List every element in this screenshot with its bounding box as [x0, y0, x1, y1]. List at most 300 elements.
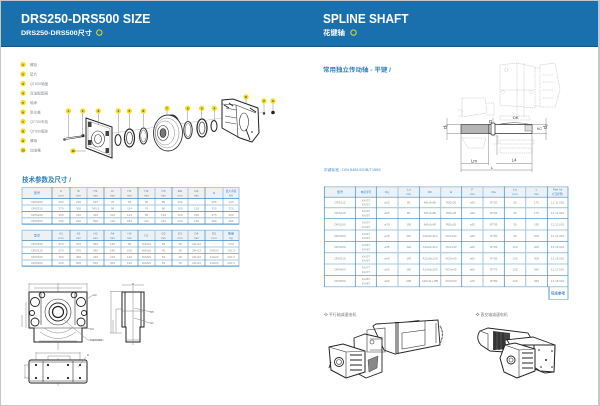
- table: dimensions 2: 140: [110, 248, 115, 252]
- table: spline shaft parameters: ø60: [470, 268, 475, 272]
- dimension lines: [443, 115, 549, 172]
- table: dimensions 1: 100: [177, 219, 183, 223]
- table: dimensions 2: 24H13: [192, 255, 201, 259]
- table: spline shaft parameters: ø36: [470, 211, 475, 215]
- table: dimensions 2: kg: [229, 236, 233, 240]
- table: spline shaft parameters: 12.18.001: [551, 279, 565, 283]
- technical drawing: front view: D2: [93, 293, 97, 297]
- parts legend: QT700车轮: [30, 119, 49, 124]
- table: dimensions 1: 70: [111, 200, 114, 204]
- table: spline shaft parameters: ø36: [470, 200, 475, 204]
- table: spline shaft parameters: ø40: [470, 245, 475, 249]
- table: spline shaft parameters: KA/47: [362, 232, 370, 236]
- table: spline shaft parameters: KA/37: [362, 203, 370, 207]
- callout lines and numbers: 3: [97, 109, 99, 113]
- technical drawing: front view: 4-Q4×H81: [90, 338, 103, 342]
- table: dimensions 2: D2: [162, 232, 166, 236]
- table: dimensions 2: 38: [178, 242, 182, 246]
- table: dimensions 1: 110: [110, 219, 115, 223]
- table: dimensions 1: 335: [211, 206, 217, 210]
- table: dimensions 2: 210: [110, 255, 115, 259]
- table: dimensions 2: 500: [58, 261, 64, 265]
- table: dimensions 1: H1: [94, 189, 98, 193]
- callout lines and numbers: 2: [82, 109, 84, 113]
- table: dimensions 1: 360: [58, 213, 64, 217]
- table: dimensions 1: 345.5: [92, 206, 100, 210]
- table: dimensions 1: 130: [161, 213, 166, 217]
- table: dimensions 1: 60: [145, 200, 148, 204]
- table: dimensions 1: 700: [58, 219, 64, 223]
- table: spline shaft parameters: ø25: [384, 200, 390, 204]
- table: dimensions 2: D4: [195, 232, 199, 236]
- table: dimensions 1: mm: [177, 194, 183, 198]
- table: dimensions 2: 40: [162, 248, 165, 252]
- table: spline shaft parameters: ø35: [384, 234, 390, 238]
- table: spline shaft parameters: ø30: [384, 222, 390, 226]
- table: dimensions 1: 220: [228, 206, 234, 210]
- table: spline shaft parameters: 175: [534, 200, 539, 204]
- table: dimensions 2: D5: [212, 232, 216, 236]
- table: spline shaft parameters: DRS400: [334, 268, 346, 272]
- table: spline shaft parameters: RT35: [490, 222, 498, 226]
- table: spline shaft parameters: mm: [534, 192, 539, 196]
- table: spline shaft parameters: KA/47: [362, 236, 370, 240]
- dimension lines: d₁: [443, 124, 449, 129]
- table: dimensions 2: 140: [110, 242, 115, 246]
- subtitle: spline shaft in Chinese: 花键轴: [323, 28, 345, 37]
- callout lines and numbers: 6: [187, 106, 189, 110]
- table: spline shaft parameters: DRS200: [334, 234, 346, 238]
- parts legend: [20, 62, 49, 153]
- table: spline shaft parameters: ø70: [470, 279, 475, 283]
- table: dimensions 1: ED: [178, 189, 183, 193]
- table: spline shaft parameters: RO0x40: [445, 256, 457, 260]
- table: spline shaft parameters: ø60: [384, 279, 390, 283]
- table: spline shaft parameters: 50: [513, 211, 517, 215]
- table: dimensions 2: mm: [58, 236, 64, 240]
- note: key standard: 平键标准 : DIN 5481/GOB/T1555: [324, 167, 381, 172]
- parts legend: 10: [21, 148, 25, 152]
- table: spline shaft parameters: Part Nr: [553, 188, 563, 192]
- title: DRS250-DRS500 SIZE: DRS250-DRS500 SIZE: [21, 12, 150, 26]
- callout lines and numbers: 9: [272, 99, 274, 103]
- table: spline shaft parameters: KA/37: [362, 225, 370, 229]
- table: spline shaft parameters: ø40: [384, 256, 390, 260]
- table: spline shaft parameters: M8x5x90: [424, 222, 436, 226]
- table: spline shaft parameters: 80: [407, 200, 411, 204]
- table: dimensions 2: 330.3: [227, 261, 235, 265]
- callout lines and numbers: [66, 94, 276, 154]
- table: dimensions 1: 440: [93, 213, 98, 217]
- header band: right page: [300, 1, 598, 47]
- table: spline shaft parameters: DRS160: [334, 222, 346, 226]
- table: dimensions 2: 500: [76, 261, 81, 265]
- callout lines and numbers: 8: [245, 95, 247, 99]
- table: spline shaft parameters: 65: [513, 234, 517, 238]
- table: dimensions 1: 130: [194, 213, 199, 217]
- table: dimensions 2: 310: [76, 242, 81, 246]
- table: spline shaft parameters: 120: [406, 245, 412, 249]
- parts legend: 9: [22, 139, 24, 143]
- dimension lines: DK: [513, 115, 519, 120]
- table: spline shaft parameters: 80: [407, 211, 411, 215]
- table: dimensions 1: N: [213, 191, 215, 195]
- table: spline shaft parameters: 130: [512, 256, 518, 260]
- technical drawing: front view: [22, 283, 104, 350]
- table: dimensions 2: 220.3: [227, 255, 235, 259]
- table: dimensions 1: 310: [76, 213, 81, 217]
- table: dimensions 2: 8xM20: [142, 255, 151, 259]
- table: dimensions 1: 最大承载: [226, 189, 237, 193]
- technical drawing: front view: D3: [90, 327, 94, 331]
- table: dimensions 1: 100: [177, 213, 183, 217]
- table: spline shaft parameters: 12.14.001: [551, 234, 565, 238]
- table: spline shaft parameters: 120: [512, 245, 518, 249]
- table: spline shaft parameters: KA/87: [362, 277, 370, 281]
- table: dimensions 1: 245: [93, 200, 98, 204]
- table: dimensions 2: 350: [93, 242, 98, 246]
- table: spline shaft parameters: 型号: [337, 189, 343, 194]
- parts legend: 加油嘴: [30, 148, 41, 152]
- table: dimensions 1: mm: [76, 194, 81, 198]
- table: dimensions 2: 重量: [228, 230, 234, 236]
- parts legend: QT500箱体: [30, 128, 49, 134]
- table: dimensions 1: 型号: [34, 190, 40, 195]
- table: dimensions 1: 110: [110, 213, 115, 217]
- table: spline shaft parameters: 12.16.001: [551, 256, 565, 260]
- title: SPLINE SHAFT: SPLINE SHAFT: [323, 12, 409, 26]
- table: dimensions 2: D1: [145, 234, 149, 238]
- motor: right angle shaft: [478, 328, 555, 378]
- table: dimensions 1: DRS250: [31, 200, 43, 204]
- table: spline shaft parameters: A10x8x110: [423, 234, 438, 238]
- table: spline shaft parameters: 200: [534, 234, 539, 238]
- table: dimensions 2: DRS400: [31, 255, 43, 259]
- table: dimensions 2: A1: [59, 232, 63, 236]
- table: dimensions 1: 80: [162, 200, 165, 204]
- table: dimensions 1: 90: [111, 206, 114, 210]
- parts legend: 6: [22, 110, 24, 114]
- table: dimensions 2: [22, 230, 239, 266]
- table: spline shaft parameters: RT89: [490, 279, 498, 283]
- table: dimensions 1: 110: [144, 219, 149, 223]
- table: spline shaft parameters: mm: [470, 192, 475, 196]
- parts legend: 轴承: [30, 100, 38, 105]
- table: dimensions 2: 120: [127, 255, 132, 259]
- table: spline shaft parameters: 电机型号: [361, 190, 372, 194]
- heading: common independent drive shaft: 常用独立传动轴 - 平键 /: [323, 66, 391, 74]
- parts legend: 7: [22, 120, 24, 124]
- table: spline shaft parameters: E: [450, 190, 452, 194]
- shaft: [461, 123, 532, 135]
- table: dimensions 1: 400: [228, 219, 234, 223]
- callout lines and numbers: 5: [128, 109, 130, 113]
- table: dimensions 2: 370: [76, 248, 81, 252]
- table: spline shaft parameters: M6x4x80: [424, 200, 436, 204]
- table: dimensions 1: 220: [76, 200, 81, 204]
- table: spline shaft parameters: DRS315: [334, 256, 346, 260]
- label: right angle gear motor: ❖ 直交轴减速电机: [476, 312, 508, 317]
- table: dimensions 1: H3: [162, 189, 166, 193]
- parts legend: 2: [22, 72, 24, 76]
- table: dimensions 1: mm: [110, 194, 115, 198]
- table: spline shaft parameters: ø35: [384, 245, 390, 249]
- table: spline shaft parameters: L: [536, 188, 538, 192]
- table: dimensions 1: 95: [145, 213, 148, 217]
- icon: yellow ring: [97, 30, 102, 35]
- table: dimensions 1: 70: [145, 206, 148, 210]
- table: spline shaft parameters: 140: [406, 256, 412, 260]
- label: parallel shaft gear motor: ❖ 平行轴减速电机: [324, 312, 356, 317]
- table: spline shaft parameters: KA/37: [362, 209, 370, 213]
- table: dimensions 2: 340: [93, 248, 98, 252]
- table: spline shaft parameters: DRS500: [334, 279, 346, 283]
- parts legend: 3: [22, 82, 24, 86]
- table: dimensions 2: 54: [162, 242, 165, 246]
- table: spline shaft parameters: 110: [406, 234, 411, 238]
- dimension lines: L4: [512, 158, 517, 162]
- table: spline shaft parameters: RT75: [490, 268, 498, 272]
- table: dimensions 1: R: [111, 189, 114, 193]
- table: spline shaft parameters: 195: [534, 222, 539, 226]
- table: spline shaft parameters: R00x25: [446, 222, 456, 226]
- table: spline shaft parameters: RO0x50: [445, 279, 457, 283]
- table: dimensions 2: DRS250: [31, 242, 43, 246]
- technical drawing: side view: D5: [150, 310, 154, 314]
- table: dimensions 1: DRS315: [31, 206, 43, 210]
- table: dimensions 1: mm: [93, 194, 98, 198]
- table: dimensions 2: 520: [93, 261, 98, 265]
- table: spline shaft parameters: A18x11x185: [422, 279, 439, 283]
- table: spline shaft parameters: [324, 186, 568, 300]
- table: spline shaft parameters: 包括参考: [551, 290, 566, 296]
- table: dimensions 2: 450: [76, 255, 81, 259]
- technical drawing: bottom view: [24, 352, 89, 386]
- table: spline shaft parameters: M6x4x80: [424, 211, 436, 215]
- table: dimensions 2: 78: [178, 261, 182, 265]
- table: spline shaft parameters: 50: [513, 222, 517, 226]
- table: dimensions 1: mm: [144, 194, 149, 198]
- table: dimensions 1: A: [60, 189, 63, 193]
- callout lines and numbers: 5: [201, 106, 203, 110]
- parts legend: 双油脂垫圈: [30, 90, 48, 96]
- table: spline shaft parameters: RC2x30: [446, 234, 457, 238]
- table: spline shaft parameters: R00x25: [446, 200, 456, 204]
- ghosted gear housing: [458, 63, 560, 153]
- table: spline shaft parameters: ø40: [470, 234, 475, 238]
- table: dimensions 2: 440: [93, 255, 98, 259]
- callout lines and numbers: 6: [142, 109, 144, 113]
- table: dimensions 2: 70.0: [228, 242, 234, 246]
- table: dimensions 1: 140: [228, 200, 234, 204]
- callout lines and numbers: 2: [263, 99, 265, 103]
- table: dimensions 2: A4: [111, 232, 115, 236]
- table: dimensions 2: 130.3: [227, 248, 235, 252]
- table: dimensions 1: 300: [76, 206, 81, 210]
- table: dimensions 2: mm: [93, 236, 98, 240]
- table: spline shaft parameters: 140: [512, 279, 518, 283]
- table: spline shaft parameters: 130: [512, 268, 518, 272]
- table: spline shaft parameters: RC2x30: [446, 245, 457, 249]
- table: spline shaft parameters: 50: [513, 200, 517, 204]
- table: spline shaft parameters: A10x8x110: [423, 245, 438, 249]
- table: spline shaft parameters: 359: [534, 279, 539, 283]
- table: spline shaft parameters: 206: [534, 245, 539, 249]
- technical drawing: side view: D1: [150, 321, 154, 325]
- table: spline shaft parameters: Ld: [407, 188, 411, 192]
- header band: left page: [1, 1, 300, 47]
- table: dimensions 1: DRS500: [31, 219, 43, 223]
- table: spline shaft parameters: 12.12.001: [551, 211, 565, 215]
- spline shaft technical drawing: [443, 63, 560, 172]
- technical drawing: side view: B: [132, 282, 134, 286]
- table: spline shaft parameters: DRS250: [334, 245, 346, 249]
- table: dimensions 1: 265: [211, 200, 217, 204]
- parts legend: 8: [22, 129, 24, 133]
- table: dimensions 1: D4: [195, 189, 199, 193]
- parts legend: 4: [22, 91, 24, 95]
- table: spline shaft parameters: ø25: [384, 211, 390, 215]
- table: dimensions 2: 型号: [34, 232, 40, 238]
- table: dimensions 1: 240: [76, 219, 81, 223]
- table: dimensions 2: mm: [161, 236, 166, 240]
- table: dimensions 2: 100: [127, 248, 132, 252]
- table: dimensions 2: DRS315: [31, 248, 43, 252]
- table: dimensions 1: 260: [58, 200, 64, 204]
- dimension lines: d₂: [543, 124, 549, 129]
- table: spline shaft parameters: 340: [534, 268, 539, 272]
- table: spline shaft parameters: DRS125: [334, 211, 346, 215]
- table: spline shaft parameters: 12.11.001: [551, 200, 564, 204]
- table: dimensions 2: mm: [211, 236, 217, 240]
- table: dimensions 2: mm: [127, 236, 132, 240]
- table: spline shaft parameters: RT50: [490, 234, 498, 238]
- table: spline shaft parameters: Dw: [491, 190, 497, 194]
- table: spline shaft parameters: RT65: [490, 245, 498, 249]
- table: dimensions 1: 475: [211, 213, 217, 217]
- table: spline shaft parameters: 175: [534, 211, 539, 215]
- table: spline shaft parameters: RT65: [490, 256, 498, 260]
- table: dimensions 1: B: [77, 189, 80, 193]
- callout lines and numbers: 10: [71, 149, 75, 153]
- table: spline shaft parameters: KA/77: [362, 270, 370, 274]
- technical drawing: bottom view: D: [87, 353, 89, 357]
- table: dimensions 1: 120: [194, 206, 199, 210]
- parts legend: QT600轴盖: [30, 81, 49, 86]
- table: spline shaft parameters: Lw: [513, 188, 518, 192]
- table: spline shaft parameters: DK: [428, 190, 433, 194]
- table: dimensions 2: mm: [194, 236, 199, 240]
- table: dimensions 2: 24H20: [210, 255, 219, 259]
- table: dimensions 1: 183: [127, 219, 132, 223]
- table: spline shaft parameters: 12.15.001: [551, 245, 565, 249]
- table: dimensions 1: [22, 187, 239, 224]
- table: dimensions 1: mm: [58, 194, 64, 198]
- motor: parallel shaft: [329, 320, 442, 378]
- table: spline shaft parameters: RT20: [490, 200, 498, 204]
- table: dimensions 2: mm: [110, 236, 115, 240]
- table: spline shaft parameters: mm: [406, 192, 412, 196]
- table: spline shaft parameters: 12.17.001: [551, 268, 565, 272]
- table: spline shaft parameters: 100: [406, 222, 412, 226]
- table: spline shaft parameters: A14x9x150: [422, 268, 438, 272]
- table: spline shaft parameters: ø50: [384, 268, 390, 272]
- table: dimensions 1: 100: [177, 200, 183, 204]
- table: spline shaft parameters: mm: [512, 192, 518, 196]
- table: dimensions 2: 90: [128, 242, 131, 246]
- icon: yellow ring: [351, 30, 356, 35]
- table: dimensions 1: H1: [128, 189, 132, 193]
- table: spline shaft parameters: KA/37: [362, 198, 370, 202]
- table: spline shaft parameters: RT25: [490, 211, 498, 215]
- parts legend: 螺母: [30, 138, 38, 143]
- table: dimensions 1: DRS400: [31, 213, 43, 217]
- table: dimensions 1: mm: [194, 194, 199, 198]
- table: dimensions 2: 310: [58, 242, 64, 246]
- table: dimensions 1: 114: [127, 206, 132, 210]
- parts legend: 垫片: [30, 72, 38, 76]
- table: spline shaft parameters: KA/47: [362, 243, 370, 247]
- table: dimensions 2: 51: [162, 255, 165, 259]
- dimension lines: L: [491, 165, 494, 170]
- table: dimensions 2: A2: [77, 232, 81, 236]
- table: dimensions 1: H2: [145, 189, 149, 193]
- table: dimensions 2: 370: [58, 248, 64, 252]
- table: spline shaft parameters: KA/37: [362, 220, 370, 224]
- table: dimensions 2: 24H13: [192, 242, 201, 246]
- table: dimensions 1: 370: [58, 206, 64, 210]
- table: dimensions 1: -: [196, 200, 197, 204]
- table: spline shaft parameters: F: [471, 188, 473, 192]
- table: dimensions 2: H3: [94, 232, 98, 236]
- table: spline shaft parameters: 308: [534, 256, 539, 260]
- table: dimensions 1: 590: [93, 219, 98, 223]
- table: dimensions 1: mm: [161, 194, 166, 198]
- table: dimensions 2: 24H26: [210, 261, 219, 265]
- table: dimensions 2: 24H13: [192, 261, 201, 265]
- wheel: [154, 115, 182, 151]
- table: spline shaft parameters: 12.13.001: [551, 222, 565, 226]
- table: dimensions 2: 18: [178, 248, 182, 252]
- parts legend: 5: [22, 101, 24, 105]
- table: spline shaft parameters: ø50: [470, 256, 475, 260]
- table: dimensions 2: 51: [162, 261, 165, 265]
- table: spline shaft parameters: R00x25: [446, 211, 456, 215]
- technical drawing: side view: [110, 282, 154, 345]
- table: dimensions 1: 130: [194, 219, 199, 223]
- exploded wheel assembly drawing: [63, 94, 276, 158]
- table: dimensions 2: 18: [178, 255, 182, 259]
- table: spline shaft parameters: Dg: [385, 190, 389, 194]
- table: dimensions 1: kN: [229, 194, 233, 198]
- table: dimensions 2: 24H20: [210, 248, 219, 252]
- table: dimensions 2: H2: [128, 232, 132, 236]
- table: dimensions 2: 8xM16: [142, 242, 151, 246]
- table: dimensions 2: mm: [76, 236, 81, 240]
- table: spline shaft parameters: KA/57: [362, 254, 370, 258]
- callout lines and numbers: 4: [213, 106, 215, 110]
- table: dimensions 2: 300: [110, 261, 115, 265]
- table: dimensions 1: mm: [127, 194, 132, 198]
- table: dimensions 2: DRS500: [31, 261, 43, 265]
- table: spline shaft parameters: 160: [406, 268, 412, 272]
- table: dimensions 2: -: [214, 242, 215, 246]
- gearbox housing: [222, 99, 259, 142]
- plate cover: [86, 118, 112, 158]
- dimension lines: Lm: [471, 158, 477, 164]
- table: dimensions 1: 490: [211, 219, 217, 223]
- table: spline shaft parameters: A12x8x120: [422, 256, 438, 260]
